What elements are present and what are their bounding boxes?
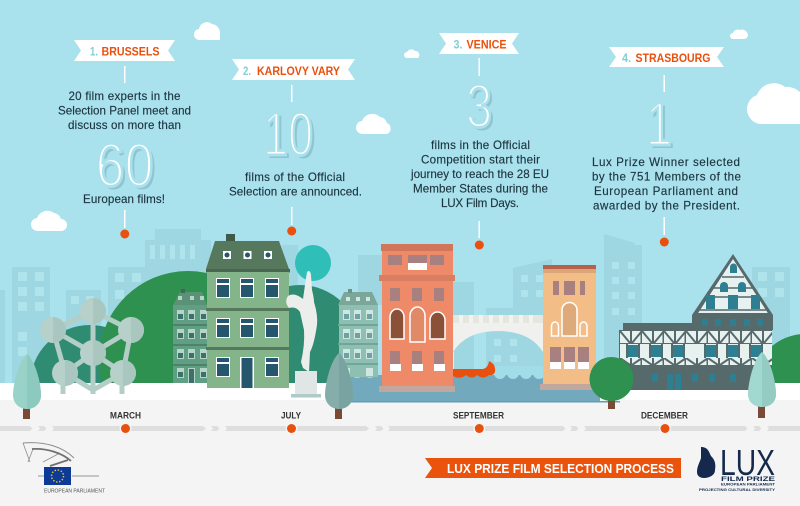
milestone: March: MARCH — [110, 410, 141, 422]
text: winner: European Parliament and — [594, 185, 738, 198]
logo: European Parliament — [23, 443, 106, 494]
logo: LUX Film Prize: EUROPEAN PARLIAMENT — [721, 482, 776, 486]
red Venetian building — [379, 244, 455, 392]
text: official selection — [229, 171, 362, 198]
icon: Atomium — [40, 298, 144, 394]
banner: Venice: VENICE — [466, 38, 506, 52]
banner: Strasbourg: 4. — [622, 51, 631, 65]
tree middle — [325, 353, 353, 419]
text: official selection: Selection are announced. — [229, 186, 362, 198]
hills — [30, 271, 800, 449]
banner: Brussels: 1. — [90, 44, 98, 58]
text: experts — [58, 90, 191, 132]
banner: Brussels — [74, 40, 175, 61]
timeline — [0, 410, 800, 434]
text: experts: 20 film experts in the — [68, 90, 180, 103]
banner: Strasbourg: STRASBOURG — [636, 51, 710, 65]
clouds — [31, 22, 800, 231]
logo: LUX Film Prize — [697, 442, 776, 492]
tree right — [748, 352, 776, 418]
half-timbered Strasbourg building — [619, 254, 773, 390]
text: official selection: films of the Official — [245, 171, 345, 184]
step 3: Venice — [410, 33, 549, 250]
banner: Venice — [439, 33, 519, 54]
milestone: March — [110, 410, 141, 434]
gondola — [453, 361, 495, 378]
text: experts: discuss on more than — [68, 119, 181, 132]
text: competition — [410, 139, 549, 210]
number 1: 1 — [646, 90, 672, 158]
step 2: Karlovy Vary — [229, 59, 362, 236]
logo: European Parliament: EUROPEAN PARLIAMENT — [44, 488, 106, 494]
number 3: 3 — [469, 75, 495, 143]
yellow Venetian building — [540, 265, 598, 390]
text: competition: films in the Official — [431, 139, 530, 152]
number 60: 60 — [96, 131, 154, 199]
banner: Strasbourg — [609, 47, 724, 67]
water canal — [350, 366, 620, 402]
logo: LUX Film Prize: PROJECTING CULTURAL DIVERSITY — [699, 487, 775, 492]
bridge — [453, 315, 543, 372]
number 10: 10 — [266, 103, 316, 171]
text: competition: Competition start their — [421, 154, 540, 166]
banner: Karlovy Vary — [232, 59, 355, 80]
banner: Venice: 3. — [454, 38, 462, 52]
pale green house right — [338, 289, 378, 377]
round tree — [590, 357, 634, 409]
text: winner: awarded by the President. — [593, 200, 740, 212]
text: competition: Member States during the — [413, 182, 548, 196]
text: winner: Lux Prize Winner selected — [592, 156, 740, 169]
text: experts: Selection Panel meet and — [58, 104, 191, 118]
logo: LUX Film Prize: FILM PRIZE — [721, 476, 776, 483]
step 4: Strasbourg — [592, 47, 741, 246]
ground — [0, 383, 800, 506]
statue: LUX figure with teal disc — [286, 245, 331, 398]
milestone: July: JULY — [281, 410, 302, 422]
text: winner — [592, 156, 741, 212]
number 1: 1 — [649, 93, 675, 161]
banner: Karlovy Vary: 2. — [243, 64, 251, 78]
number 10: 10 — [263, 100, 313, 168]
milestone: September: SEPTEMBER — [453, 410, 504, 422]
background skyline — [0, 229, 790, 400]
number 60: 60 — [98, 134, 156, 202]
title ribbon: LUX PRIZE FILM SELECTION PROCESS — [447, 461, 674, 476]
milestone: September — [453, 410, 504, 434]
banner: Karlovy Vary: KARLOVY VARY — [257, 64, 340, 78]
text: European films: European films! — [83, 193, 165, 206]
small green house left — [173, 289, 208, 383]
banner: Brussels: BRUSSELS — [102, 44, 160, 58]
number 3: 3 — [466, 72, 492, 140]
milestone: December — [641, 410, 688, 434]
text: winner: by the 751 Members of the — [592, 170, 741, 184]
text: competition: LUX Film Days. — [441, 197, 519, 210]
title ribbon — [425, 458, 681, 478]
milestone: December: DECEMBER — [641, 410, 688, 422]
logo: LUX Film Prize: LUX — [720, 442, 775, 483]
milestone: July — [281, 410, 302, 434]
tree left — [13, 354, 41, 419]
main green house — [206, 234, 290, 388]
text: competition: journey to reach the 28 EU — [410, 168, 549, 181]
step 1: Brussels — [58, 40, 191, 238]
